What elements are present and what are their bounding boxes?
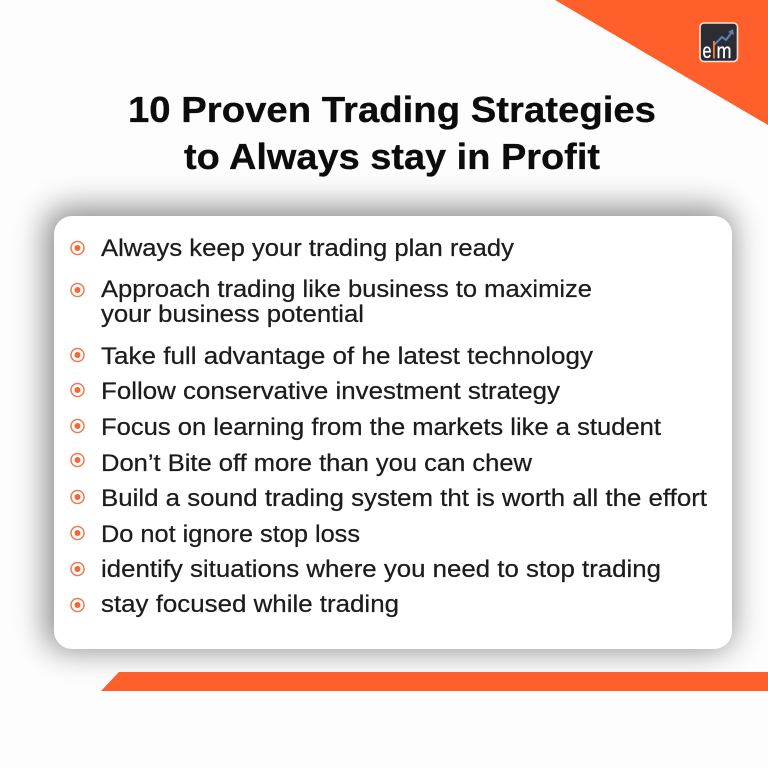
logo [700,23,738,63]
item 1: Always keep your trading plan ready [101,235,514,262]
item 8: Do not ignore stop loss [101,521,360,548]
logo: e [702,40,712,63]
top-right orange corner [555,0,768,125]
title: to Always stay in Profit [184,136,600,177]
item 2: Approach trading like business to maximize [101,276,592,303]
item 3: Take full advantage of he latest technology [101,343,593,370]
card shadow [46,208,732,650]
logo: m [716,40,732,63]
title: 10 Proven Trading Strategies [128,89,656,130]
item 6: Don’t Bite off more than you can chew [101,450,533,477]
item 2: your business potential [101,301,364,328]
panel: strategies list [54,216,732,649]
item 2 [71,276,592,328]
item 10: stay focused while trading [101,591,399,618]
item 9: identify situations where you need to stop trading [101,556,661,583]
item 4: Follow conservative investment strategy [101,378,560,405]
title [128,89,656,177]
bottom orange bar [101,672,768,691]
item 7: Build a sound trading system tht is worth all the effort [101,485,707,512]
item 5: Focus on learning from the markets like a student [101,414,661,441]
